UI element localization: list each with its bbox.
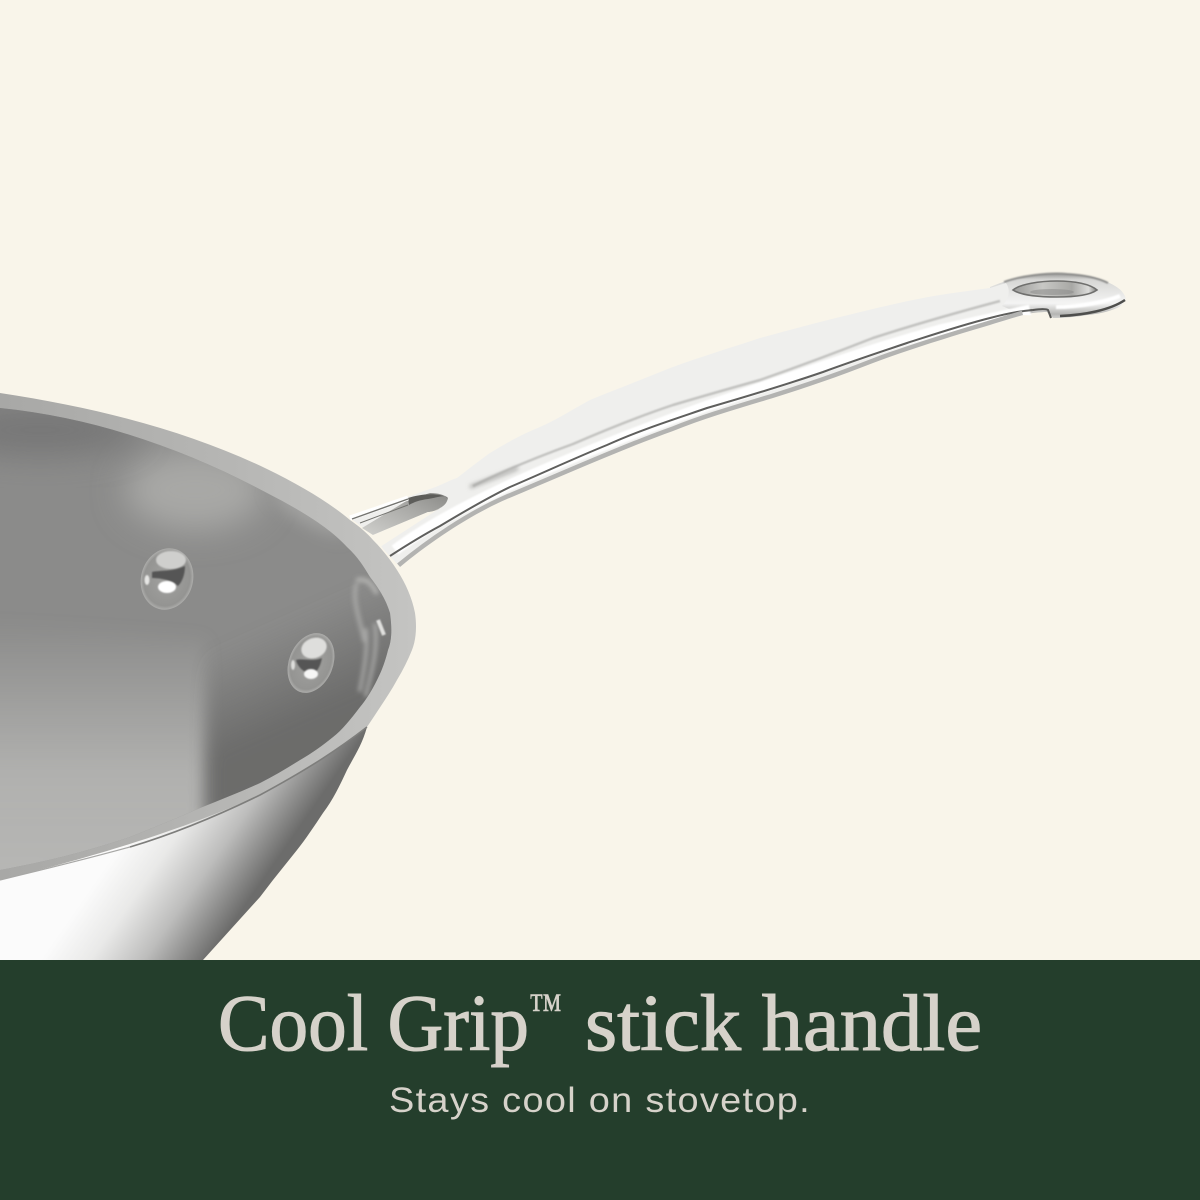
- interior rivet upper: [134, 542, 200, 616]
- green caption band: [0, 960, 1200, 1200]
- subheading: Stays cool on stovetop.: [389, 1081, 811, 1120]
- heading: stick handle: [585, 980, 982, 1068]
- interior rivet lower: [279, 626, 343, 700]
- pan interior: [0, 408, 392, 870]
- handle eyelet end: [990, 273, 1126, 323]
- illustration: stainless steel pan with stick handle: [0, 272, 1126, 960]
- inner wall reflection: [355, 580, 376, 695]
- handle opening near pan: [350, 493, 448, 547]
- heading: [218, 980, 982, 1068]
- pan rim: [0, 393, 416, 880]
- stick handle: [350, 283, 1033, 567]
- heading: ™: [529, 986, 562, 1032]
- heading: Cool Grip: [218, 980, 529, 1068]
- pan outer body: [0, 727, 367, 960]
